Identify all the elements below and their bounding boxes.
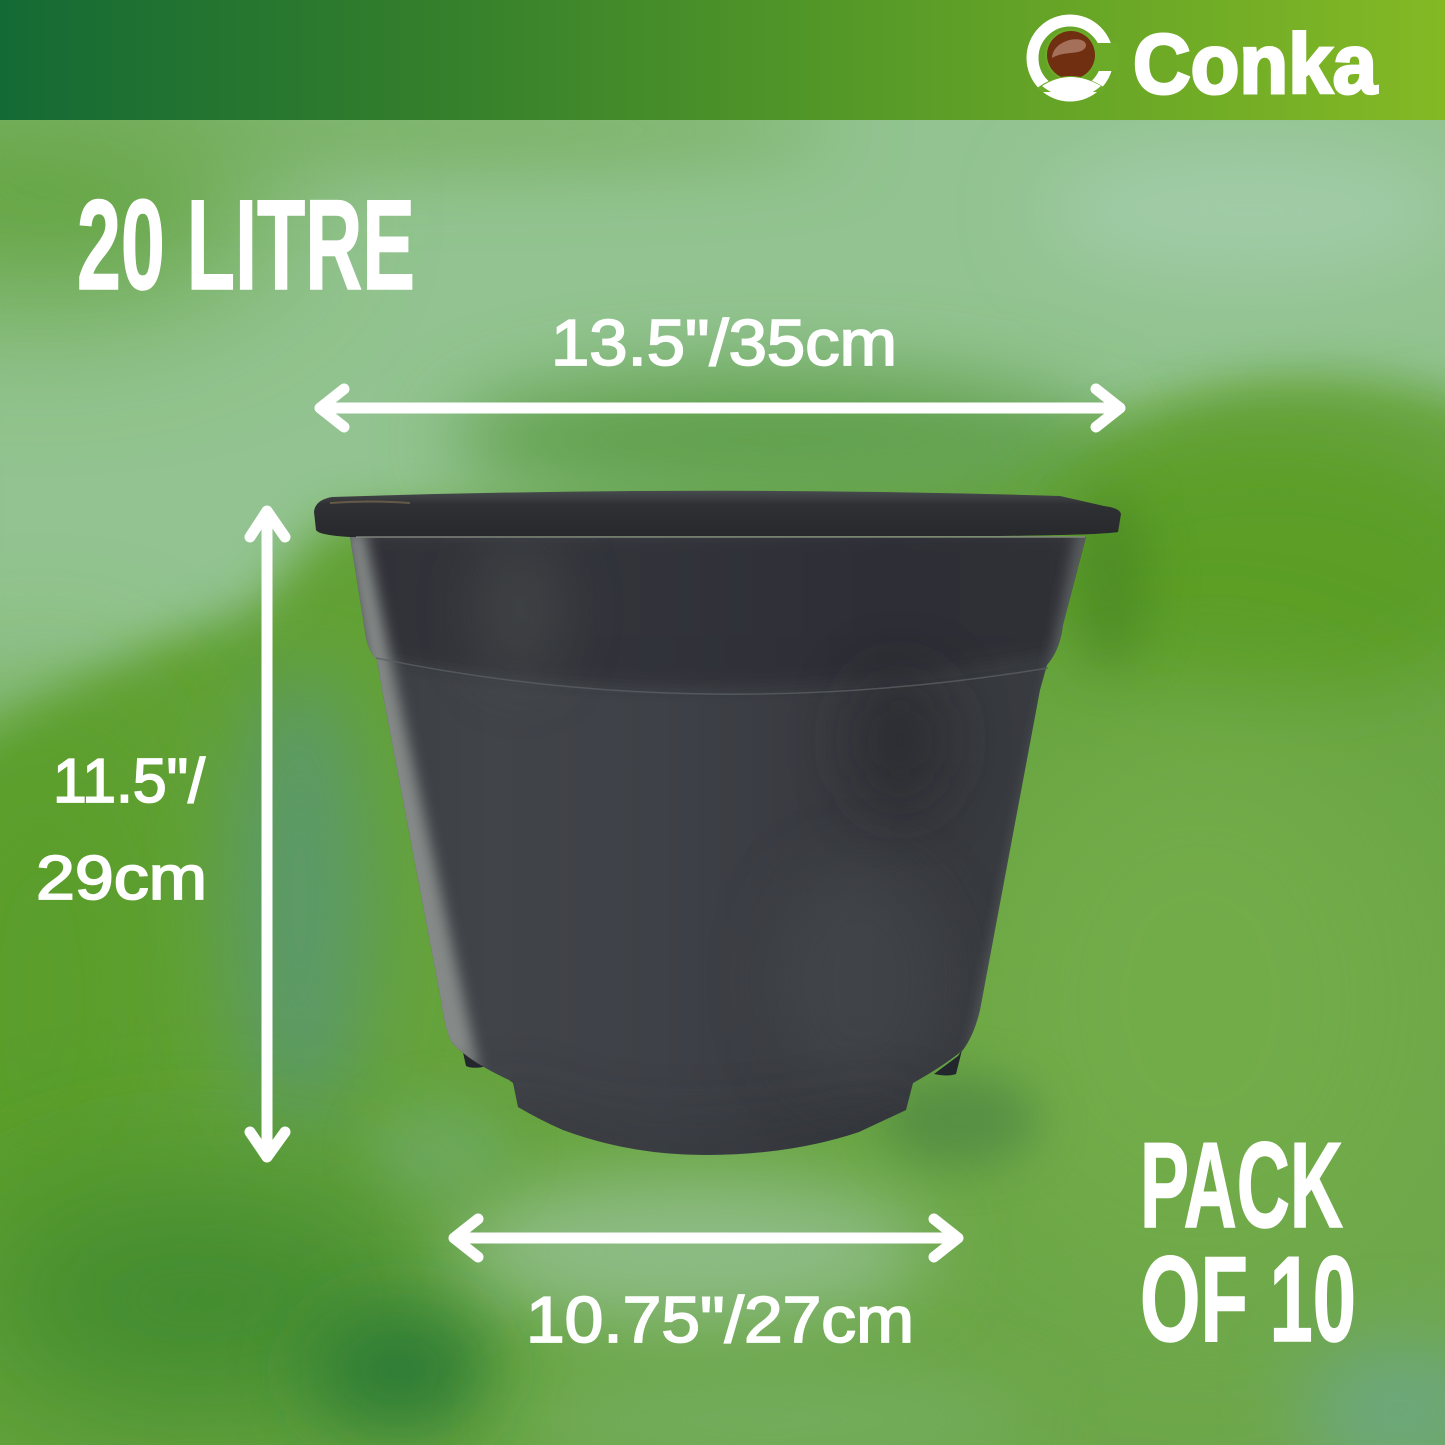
height label: 11.5"/	[53, 747, 206, 816]
arrow: height	[250, 511, 285, 1157]
pot body	[340, 530, 1100, 1170]
logo: Conka	[1032, 17, 1378, 111]
logo icon	[1032, 20, 1118, 98]
pot shading	[350, 537, 1090, 686]
header bar	[0, 0, 1445, 120]
pot	[314, 491, 1121, 1170]
heading: 20 LITRE: 20 LITRE	[77, 174, 415, 317]
pack label	[1140, 1117, 1356, 1367]
height label	[36, 747, 207, 913]
height label: 29cm	[36, 844, 207, 913]
base label: 10.75"/27cm	[526, 1283, 914, 1356]
arrow: top width	[320, 389, 1120, 427]
pot rim	[314, 491, 1121, 537]
logo wordmark: Conka	[1133, 17, 1378, 111]
width label: 13.5"/35cm	[551, 306, 897, 379]
pot band line	[376, 658, 1048, 694]
pot feet	[462, 1048, 962, 1076]
arrow: base width	[454, 1219, 958, 1257]
